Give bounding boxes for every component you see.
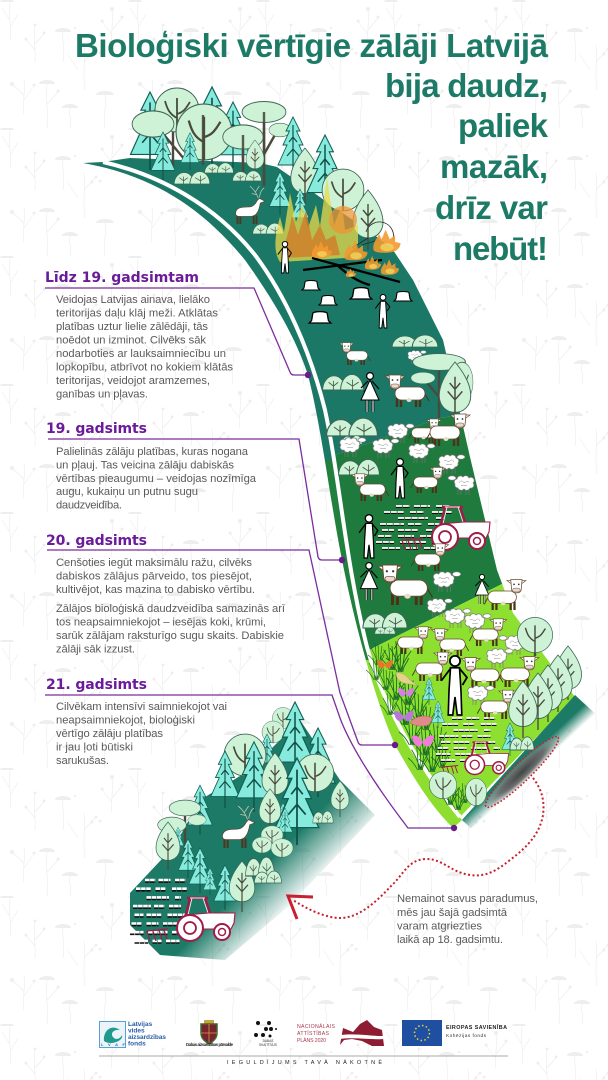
logo: nature conservation agency: Dabas aizsardzības pārvalde <box>186 1042 234 1047</box>
era 1: forest <box>130 87 383 250</box>
logo: LVAF: vides <box>128 1028 145 1034</box>
logo: LVAF: aizsardzības <box>128 1034 166 1041</box>
footer slogan: IEGULDĪJUMS TAVĀ NĀKOTNĒ <box>227 1059 382 1066</box>
section: 20th century: zālāji sāk izzust. <box>56 644 135 656</box>
section: 21st century: sarukušas. <box>56 755 109 767</box>
title <box>75 27 549 267</box>
logo: dots: SKAITĪTĀJS <box>259 1043 277 1047</box>
section: 20th century: Cenšoties iegūt maksimālu ražu, cilvēks <box>56 557 252 569</box>
field with fade <box>130 720 375 960</box>
meadow grass <box>366 641 472 810</box>
cleared land: stumps and woodcutter <box>302 280 412 328</box>
callout text: Nemainot savus paradumus, <box>397 893 538 905</box>
butterflies and birds <box>377 660 434 747</box>
callout text: mēs jau šajā gadsimtā <box>397 907 508 919</box>
section: 21st century <box>46 677 227 767</box>
tree row <box>509 646 582 738</box>
logo: national development plan: NACIONĀLAIS <box>297 1023 336 1030</box>
title: paliek <box>458 107 549 144</box>
title: Bioloģiski vērtīgie zālāji Latvijā <box>75 27 549 64</box>
section: 19th century: 19. gadsimts <box>46 421 147 437</box>
section: until 19th century: noēdot un izminot. Cilvēks sāk <box>56 334 206 346</box>
deer <box>236 186 265 224</box>
main landscape band <box>83 158 594 828</box>
logo: European Union: Kohēzijas fonds <box>446 1033 487 1039</box>
section: 20th century: dabiskos zālājus pārveido, tos piesējot, <box>56 570 252 582</box>
logo: LVAF: Latvijas <box>128 1021 153 1028</box>
section: 21st century: ir jau ļoti būtiski <box>56 742 133 754</box>
logo: LVAF: fonds <box>128 1040 146 1048</box>
era lines to timeline <box>45 288 457 831</box>
future shadow ellipse <box>480 731 564 813</box>
ploughed furrows <box>376 506 456 549</box>
footer logos <box>100 1020 507 1048</box>
era 3: bright meadow <box>363 574 582 810</box>
logo: nature conservation agency <box>186 1020 234 1047</box>
section: 19th century <box>46 421 257 512</box>
tractor <box>442 742 508 774</box>
logo: national development plan: ATTĪSTĪBAS <box>297 1030 330 1037</box>
logo: national development plan: PLĀNS 2020 <box>297 1037 326 1044</box>
section: until 19th century: nodarboties ar lauksaimniecību un <box>56 348 226 360</box>
section: until 19th century: Līdz 19. gadsimtam <box>45 270 199 286</box>
section: 19th century: daudzveidība. <box>56 500 122 512</box>
farmer <box>359 515 378 558</box>
section: 19th century: vērtības pieaugumu – veidojas nozīmīga <box>56 473 257 485</box>
logo: dots: DABAS <box>263 1039 273 1043</box>
lower scene: return of the forest <box>130 702 375 960</box>
left trees <box>156 785 255 912</box>
section: 20th century: kultivējot, kas mazina to dabisko vērtību. <box>56 584 255 596</box>
bush corner <box>363 612 407 628</box>
flames <box>275 178 358 262</box>
furrows <box>436 718 500 761</box>
section: 20th century <box>46 533 286 656</box>
person at fire <box>278 241 291 273</box>
flock <box>394 574 539 719</box>
bushes <box>174 163 283 234</box>
logo: LVAF: L V A F <box>101 1042 126 1047</box>
logo: dots <box>254 1021 277 1047</box>
fire <box>275 178 400 285</box>
title: nebūt! <box>453 230 548 267</box>
title: drīz var <box>435 189 548 226</box>
logo: European Union <box>402 1020 507 1046</box>
dotted return arrow <box>288 778 544 919</box>
era 2: pasture with sheep, cattle, people <box>339 414 490 605</box>
section: until 19th century: teritorijas, veidojot aramzemes, <box>56 375 210 387</box>
cut logs <box>303 258 400 285</box>
section: 19th century: Palielinās zālāju platības, kuras nogana <box>56 446 249 458</box>
bushes <box>246 811 333 883</box>
callout text <box>397 893 538 946</box>
callout text: laikā ap 18. gadsimtu. <box>397 934 503 946</box>
section: 20th century: 20. gadsimts <box>46 533 147 549</box>
section: 20th century: Zālājos bioloģiskā daudzveidība samazinās arī <box>56 602 286 615</box>
section: until 19th century: Veidojas Latvijas ainava, lielāko <box>56 294 210 306</box>
round bushes at end <box>429 771 457 799</box>
conifers front <box>151 132 264 180</box>
back trees <box>211 702 349 845</box>
white line <box>103 162 460 817</box>
lone round tree <box>534 625 536 656</box>
section: until 19th century: ganības un pļavas. <box>56 388 148 400</box>
era 1 pasture: bushes, cattle, people <box>323 335 473 444</box>
logo: national development plan <box>297 1020 384 1046</box>
round and umbrella trees <box>132 88 291 186</box>
left stripe by era <box>83 162 462 826</box>
title: bija daudz, <box>385 67 548 104</box>
title: mazāk, <box>440 148 548 185</box>
logo: European Union: EIROPAS SAVIENĪBA <box>446 1024 507 1031</box>
conifers back <box>130 87 250 170</box>
teal field edge <box>462 695 602 846</box>
section: 19th century: augu, kukaiņu un putnu sugu <box>56 486 198 498</box>
section: until 19th century <box>45 270 233 400</box>
tractor <box>402 507 490 550</box>
large farmer <box>442 656 467 715</box>
section: until 19th century: platības uztur lielie zālēdāji, tās <box>56 321 208 333</box>
section: 21st century: Cilvēkam intensīvi saimniekojot vai <box>56 701 227 713</box>
section: 20th century: tos neapsaimniekojot – iesējas koki, krūmi, <box>56 616 266 628</box>
section: until 19th century: lopkopību, atbrīvot no kokiem klātās <box>56 362 233 374</box>
furrows <box>130 880 190 942</box>
logo: LVAF <box>100 1021 166 1048</box>
section: 21st century: 21. gadsimts <box>46 677 147 693</box>
section: 19th century: un pļauj. Tas veicina zālāju dabiskās <box>56 460 234 472</box>
fallen branches <box>352 222 394 248</box>
forest edge trees <box>269 117 383 250</box>
section: 21st century: neapsaimniekojot, bioloģiski <box>56 714 195 726</box>
callout text: varam atgriezties <box>397 920 482 932</box>
small fires <box>312 230 400 277</box>
small conifers <box>422 678 436 705</box>
section: until 19th century: teritorijas daļu klāj meži. Atklātas <box>56 308 218 320</box>
deer <box>222 806 255 848</box>
tractor <box>147 898 235 941</box>
section: 20th century: sarūk zālājam raksturīgo sugu skaits. Dabiskie <box>56 630 284 642</box>
arrow head <box>288 896 313 919</box>
field zones <box>108 158 574 817</box>
section: 21st century: vērtīgo zālāju platības <box>56 728 163 740</box>
